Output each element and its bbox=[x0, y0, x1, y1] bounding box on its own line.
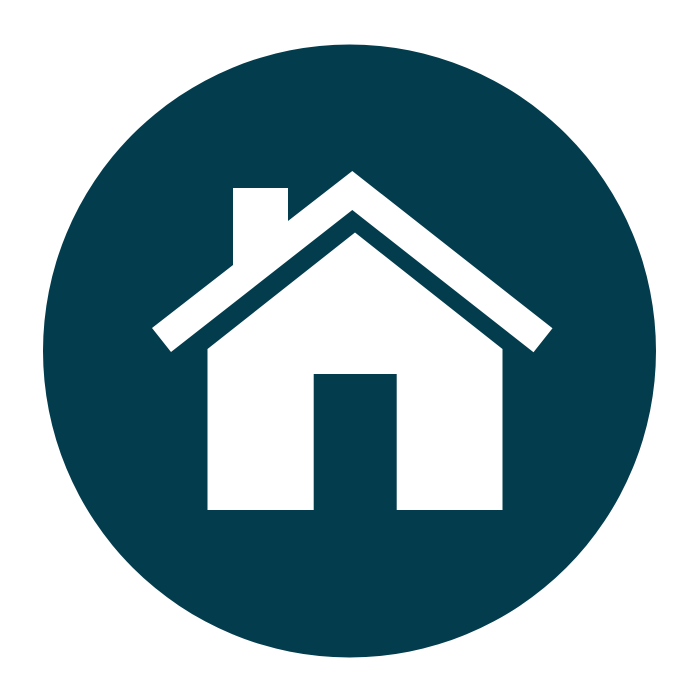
circle background bbox=[43, 44, 656, 658]
icon: house bbox=[152, 171, 552, 510]
house body with door bbox=[208, 232, 502, 510]
roof with chimney bbox=[152, 171, 552, 352]
